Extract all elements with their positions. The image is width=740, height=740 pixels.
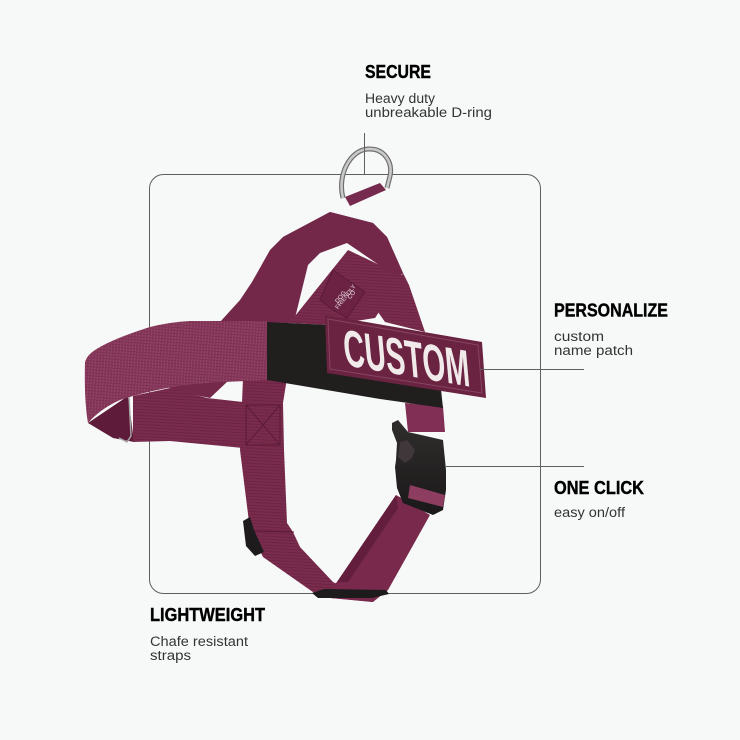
callout: lightweight: LIGHTWEIGHT: [150, 604, 266, 625]
callout: secure: unbreakable D-ring: [365, 105, 492, 120]
right rear strap: [378, 273, 425, 332]
metal slide: [119, 397, 131, 442]
lower chest strap: [240, 378, 373, 602]
plastic buckle: [392, 420, 446, 515]
leader line: buckle: [446, 466, 584, 468]
callout: personalize: name patch: [554, 343, 633, 358]
harness illustration: [85, 149, 486, 602]
woven label: DOG: [335, 290, 348, 305]
velcro panel: [267, 322, 443, 408]
callout: personalize: PERSONALIZE: [554, 300, 668, 320]
seam at fold: [252, 531, 294, 532]
woven label: FRIENDLY: [335, 284, 358, 311]
callout: one click: ONE CLICK: [554, 477, 645, 498]
callout: one click: easy on/off: [554, 505, 625, 520]
chest strap under belt: [133, 388, 243, 448]
left slider: [243, 517, 264, 556]
collar belt: [85, 321, 267, 423]
back strap: [288, 250, 403, 325]
inner belt shadow: [88, 396, 134, 442]
callout: lightweight: straps: [150, 648, 191, 663]
right lower strap: [320, 495, 430, 602]
callout: secure: SECURE: [365, 61, 431, 82]
name patch: CUSTOM: [341, 319, 472, 399]
callout: one click: [554, 477, 645, 520]
bottom slider: [312, 589, 389, 598]
frame outline: [150, 174, 540, 594]
leader line: patch: [480, 368, 584, 370]
leader line: D-ring: [364, 133, 366, 175]
buckle slot strap: [408, 485, 445, 507]
callout: lightweight: [150, 604, 266, 663]
callout: secure: Heavy duty: [365, 91, 435, 106]
name patch: [325, 315, 486, 399]
callout: secure: [365, 61, 492, 120]
stitched box: [246, 405, 280, 445]
strap behind belt: [165, 381, 228, 398]
left shoulder strap: [220, 212, 403, 323]
callout: lightweight: Chafe resistant: [150, 634, 248, 649]
upper buckle strap: [405, 403, 445, 432]
buckle opening: [398, 440, 415, 463]
strap fold: [283, 212, 403, 278]
lower strap edge: [337, 495, 398, 582]
D-ring loop: [342, 149, 391, 206]
callout: personalize: custom: [554, 329, 604, 344]
callout: personalize: [554, 300, 668, 358]
woven label: CO: [347, 290, 358, 301]
woven label: [320, 270, 365, 318]
